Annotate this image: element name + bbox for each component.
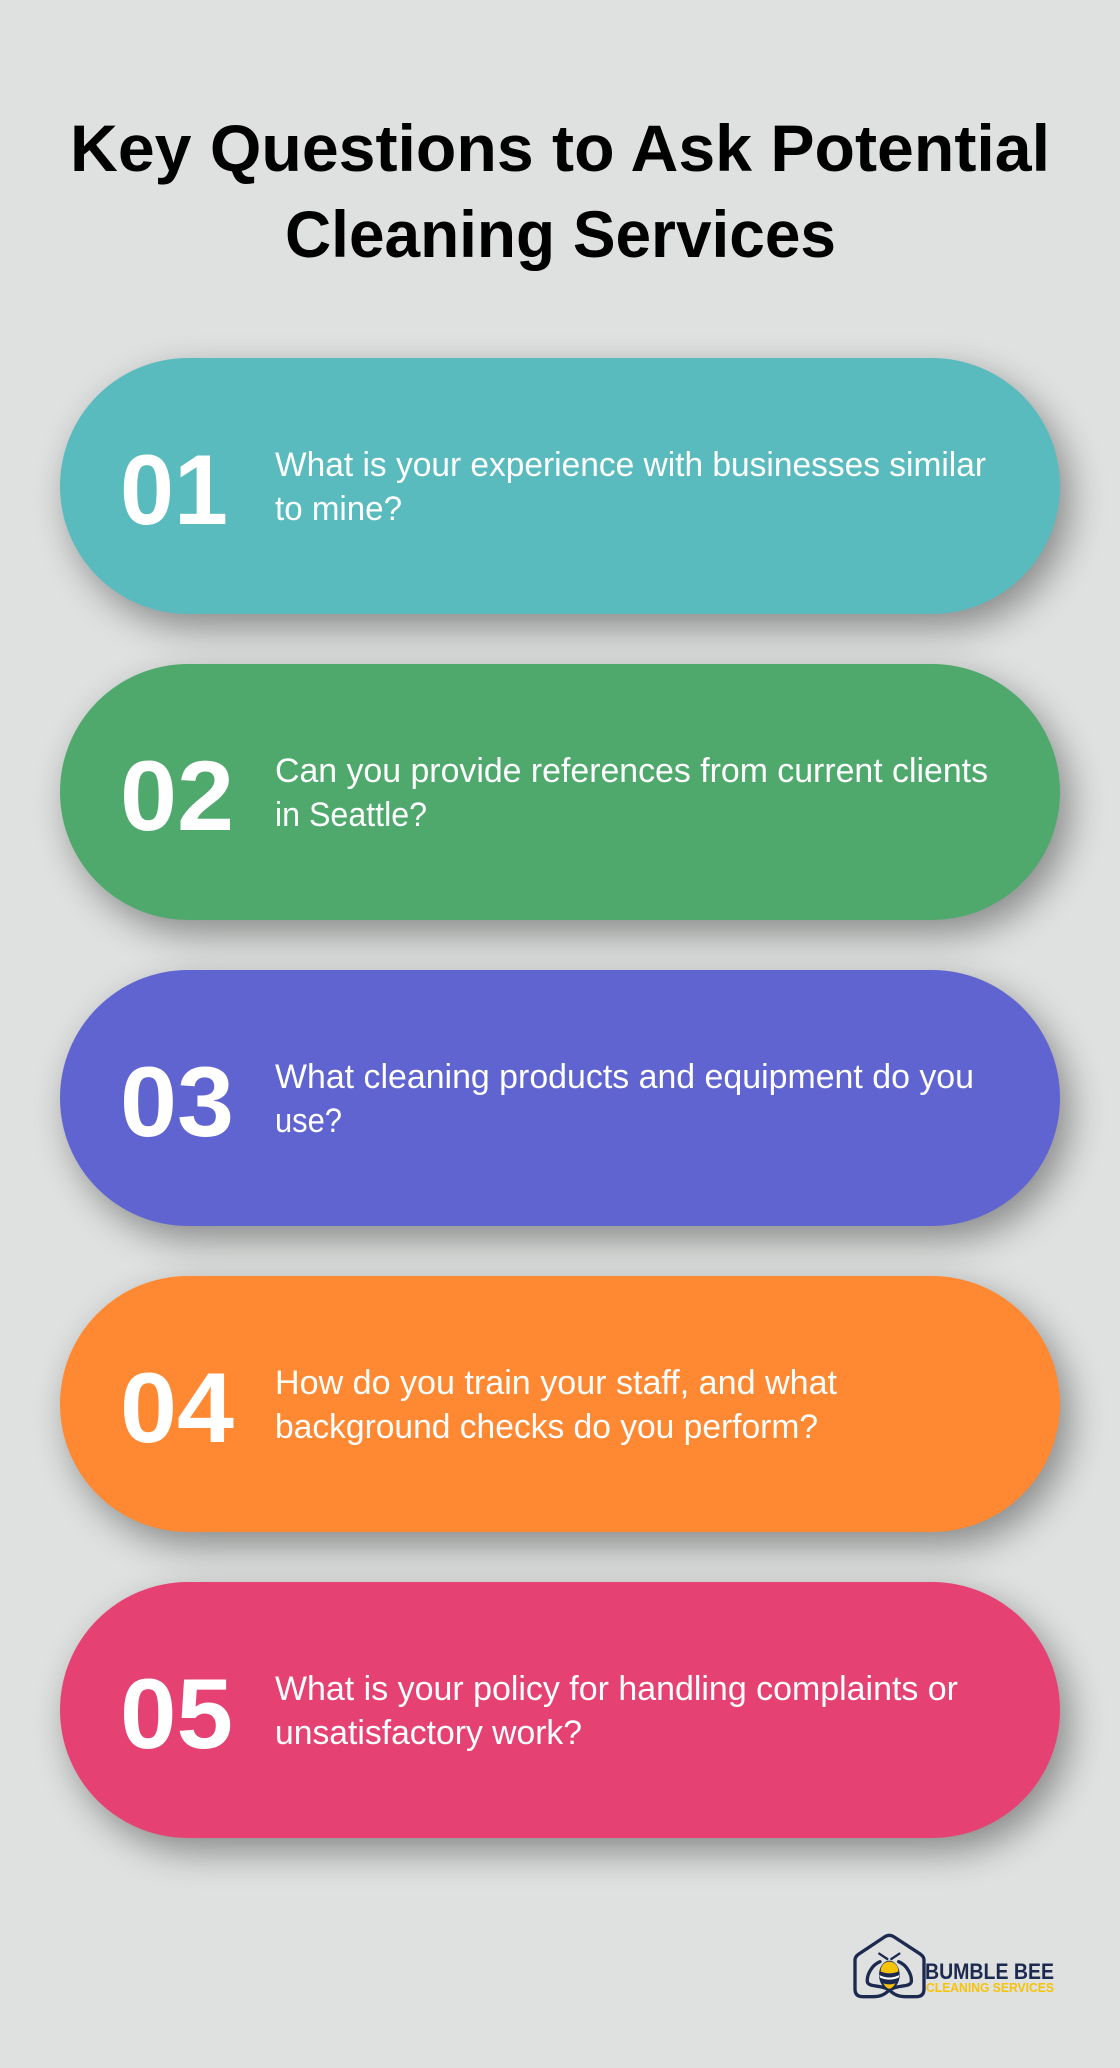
panel: question 01 (60, 358, 1070, 628)
panel: question 04: How do you train your staff, and what (275, 1364, 838, 1402)
panel: question 03 (60, 970, 1070, 1240)
panel: question 01: to mine? (275, 490, 402, 528)
title: Cleaning Services (285, 197, 836, 271)
title: Key Questions to Ask Potential (70, 111, 1050, 185)
panel: question 05: 05 (120, 1658, 233, 1769)
panel: question 02: in Seattle? (275, 796, 427, 834)
panel: question 05: unsatisfactory work? (275, 1714, 582, 1752)
logo: Bumble Bee Cleaning Services (855, 1935, 1054, 1997)
panel: question 04: background checks do you perform? (275, 1408, 818, 1446)
logo tagline: CLEANING SERVICES (926, 1981, 1054, 1995)
panel: question 05: What is your policy for handling complaints or (275, 1670, 958, 1708)
panel: question 02: Can you provide references from current clients (275, 752, 988, 790)
panel: question 04 (60, 1276, 1070, 1546)
panel: question 01: What is your experience with businesses similar (275, 446, 986, 484)
icon: house with bee (855, 1935, 924, 1997)
panel: question 02 (60, 664, 1070, 934)
logo wordmark: BUMBLE BEE (925, 1959, 1054, 1984)
panel: question 03: 03 (120, 1046, 234, 1157)
title (70, 111, 1050, 271)
panel: question 04: 04 (120, 1352, 234, 1463)
panel: question 03: What cleaning products and equipment do you (275, 1058, 974, 1096)
panel: question 03: use? (275, 1102, 342, 1140)
panel: question 05 (60, 1582, 1070, 1852)
panel: question 02: 02 (120, 740, 234, 851)
panel: question 01: 01 (120, 434, 228, 545)
